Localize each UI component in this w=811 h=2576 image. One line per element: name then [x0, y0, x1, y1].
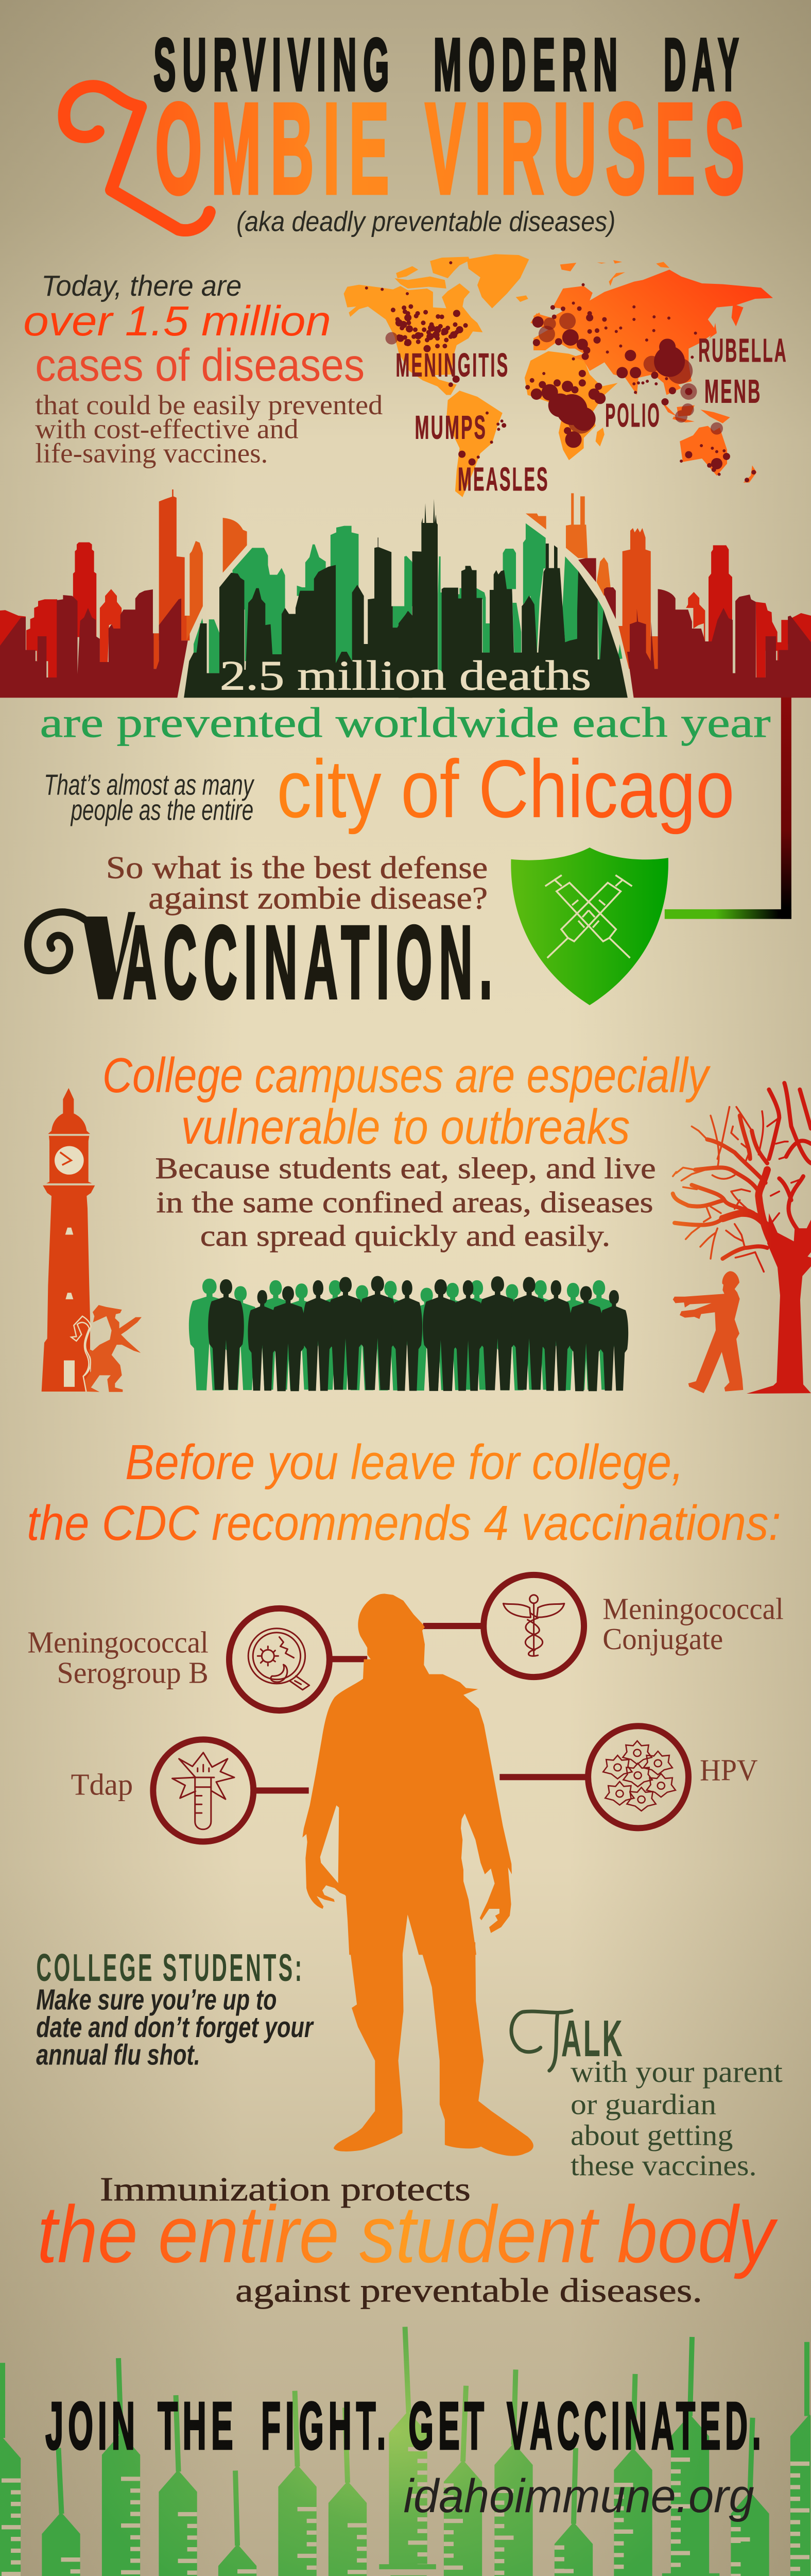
section: recommended vaccines: [27, 1575, 784, 2089]
dark green silhouette: [184, 547, 412, 698]
talk text continued: [571, 2088, 757, 2182]
dark green silhouette: [399, 499, 628, 698]
disease dots: [367, 263, 754, 480]
map labels: POLIO: [605, 397, 661, 434]
skyline: left half: [0, 489, 412, 698]
label: Serogroup B: [57, 1656, 209, 1690]
clock hands: [60, 1152, 71, 1165]
connector line to shield: [665, 698, 791, 919]
section: skyline text and vaccination: [28, 652, 791, 1020]
syringe long ticks: [11, 2447, 800, 2576]
figure: zombie student silhouette: [302, 1594, 533, 2156]
explanation text: can spread quickly and easily.: [200, 1219, 610, 1252]
zombie: [673, 1271, 743, 1393]
callout: college students: date and don’t forget your: [36, 2011, 314, 2044]
tree trunk: [747, 1213, 811, 1394]
world map: [344, 254, 773, 497]
Arctic islands: [394, 257, 470, 289]
section: skyline text and vaccination: That’s almost as many: [44, 769, 255, 801]
orange towers: [526, 493, 611, 596]
map labels: MEASLES: [458, 461, 549, 498]
intro text block: that could be easily prevented: [35, 390, 383, 420]
talk text continued: about getting: [571, 2119, 733, 2152]
icon: test tube burst: [172, 1753, 234, 1829]
dark red foreground: [578, 558, 811, 698]
label: [602, 1592, 784, 1656]
icon: caduceus: [503, 1595, 564, 1656]
call to action: JOIN: [45, 2388, 140, 2463]
clock tower: [42, 1088, 95, 1392]
heading: before you leave for college: [27, 1434, 781, 1550]
intro text block: cases of diseases: [35, 339, 365, 391]
question text: [106, 850, 488, 916]
map labels: [395, 332, 788, 498]
intro text block: over 1.5 million: [23, 297, 331, 344]
map labels: MENINGITIS: [395, 347, 509, 383]
lion: [84, 1305, 142, 1392]
intro text block: life-saving vaccines.: [35, 438, 268, 469]
lion tail outline: [71, 1316, 91, 1392]
text: immunization protects: Immunization protects: [100, 2171, 471, 2208]
orange towers: [153, 489, 189, 669]
skyline: right half: [399, 493, 811, 698]
syringes row: [0, 2327, 810, 2576]
icon: zombie and bare tree: [673, 1083, 811, 1394]
section: closing: [0, 2088, 810, 2576]
text: almost as many people: [44, 769, 255, 826]
section: recommended vaccines: COLLEGE STUDENTS:: [36, 1946, 304, 1990]
callout: talk with parent: ALK: [561, 2010, 624, 2067]
shield with crossed syringes: [511, 848, 668, 1005]
vaccine: Tdap: [71, 1739, 253, 1842]
tower windows and door: [64, 1228, 75, 1387]
needles: [3, 2327, 807, 2546]
question text: So what is the best defense: [106, 850, 488, 885]
question text: against zombie disease?: [148, 880, 488, 916]
call to action: GET: [409, 2388, 489, 2463]
North America: [344, 283, 482, 395]
label: Conjugate: [602, 1622, 723, 1656]
South America: [446, 391, 503, 497]
call to action: THE: [158, 2388, 238, 2463]
icon: crossed syringes: [545, 875, 632, 958]
label: Meningococcal: [27, 1626, 209, 1659]
map labels: MUMPS: [415, 409, 487, 446]
tree main branches: [673, 1083, 811, 1259]
intro text block: with cost-effective and: [35, 414, 299, 445]
call to action: FIGHT.: [261, 2388, 390, 2463]
call to action: [45, 2388, 766, 2463]
section: skyline text and vaccination: people as the entire: [70, 794, 253, 826]
heading: campuses vulnerable: [102, 1048, 711, 1155]
tree thick limbs: [722, 1170, 773, 1246]
callout: college students: Make sure you’re up to: [36, 1984, 277, 2016]
green buildings: [194, 526, 412, 673]
vaccine: Meningococcal Serogroup B: [27, 1608, 330, 1710]
icon: clock tower and lion: [42, 1088, 142, 1392]
vaccine: Meningococcal Conjugate: [484, 1575, 784, 1677]
stat: 2.5 million deaths: 2.5 million deaths: [220, 652, 591, 699]
section: header: [23, 24, 754, 469]
Greenland: [467, 254, 529, 308]
Africa: [525, 351, 618, 460]
northern islands: [560, 260, 669, 286]
section: college campuses: [27, 1048, 781, 1550]
vaccine: HPV: [588, 1726, 758, 1828]
label: Tdap: [71, 1768, 133, 1802]
intro text block: Today, there are: [41, 269, 241, 302]
icon: magnifier with germs: [248, 1629, 309, 1690]
syringe short ticks: [16, 2459, 795, 2576]
intro text block: [23, 269, 383, 469]
heading: Vaccination: [28, 905, 499, 1020]
callout: college students: annual flu shot.: [36, 2039, 200, 2071]
connector lines: [256, 1623, 585, 1793]
tree twigs: [673, 1107, 803, 1272]
red back buildings: [0, 543, 96, 677]
dark red foreground: [0, 589, 188, 698]
green buildings: [399, 523, 623, 672]
label: HPV: [700, 1754, 758, 1787]
red back buildings: [709, 545, 811, 677]
label: [27, 1626, 209, 1690]
callout: college students: [36, 1946, 314, 2071]
crowd: dark front row: [208, 1276, 628, 1391]
syringe bodies: [0, 2411, 810, 2576]
Indonesia and Oceania: [661, 400, 756, 483]
callout: talk with parent: [511, 2010, 783, 2089]
explanation text: [155, 1151, 656, 1252]
icon: virus cells: [603, 1741, 676, 1811]
talk text continued: or guardian: [571, 2088, 716, 2121]
antenna: [377, 537, 378, 548]
crowd: green back row: [189, 1279, 617, 1391]
Eurasia: [530, 269, 773, 395]
clock face: [55, 1146, 84, 1175]
